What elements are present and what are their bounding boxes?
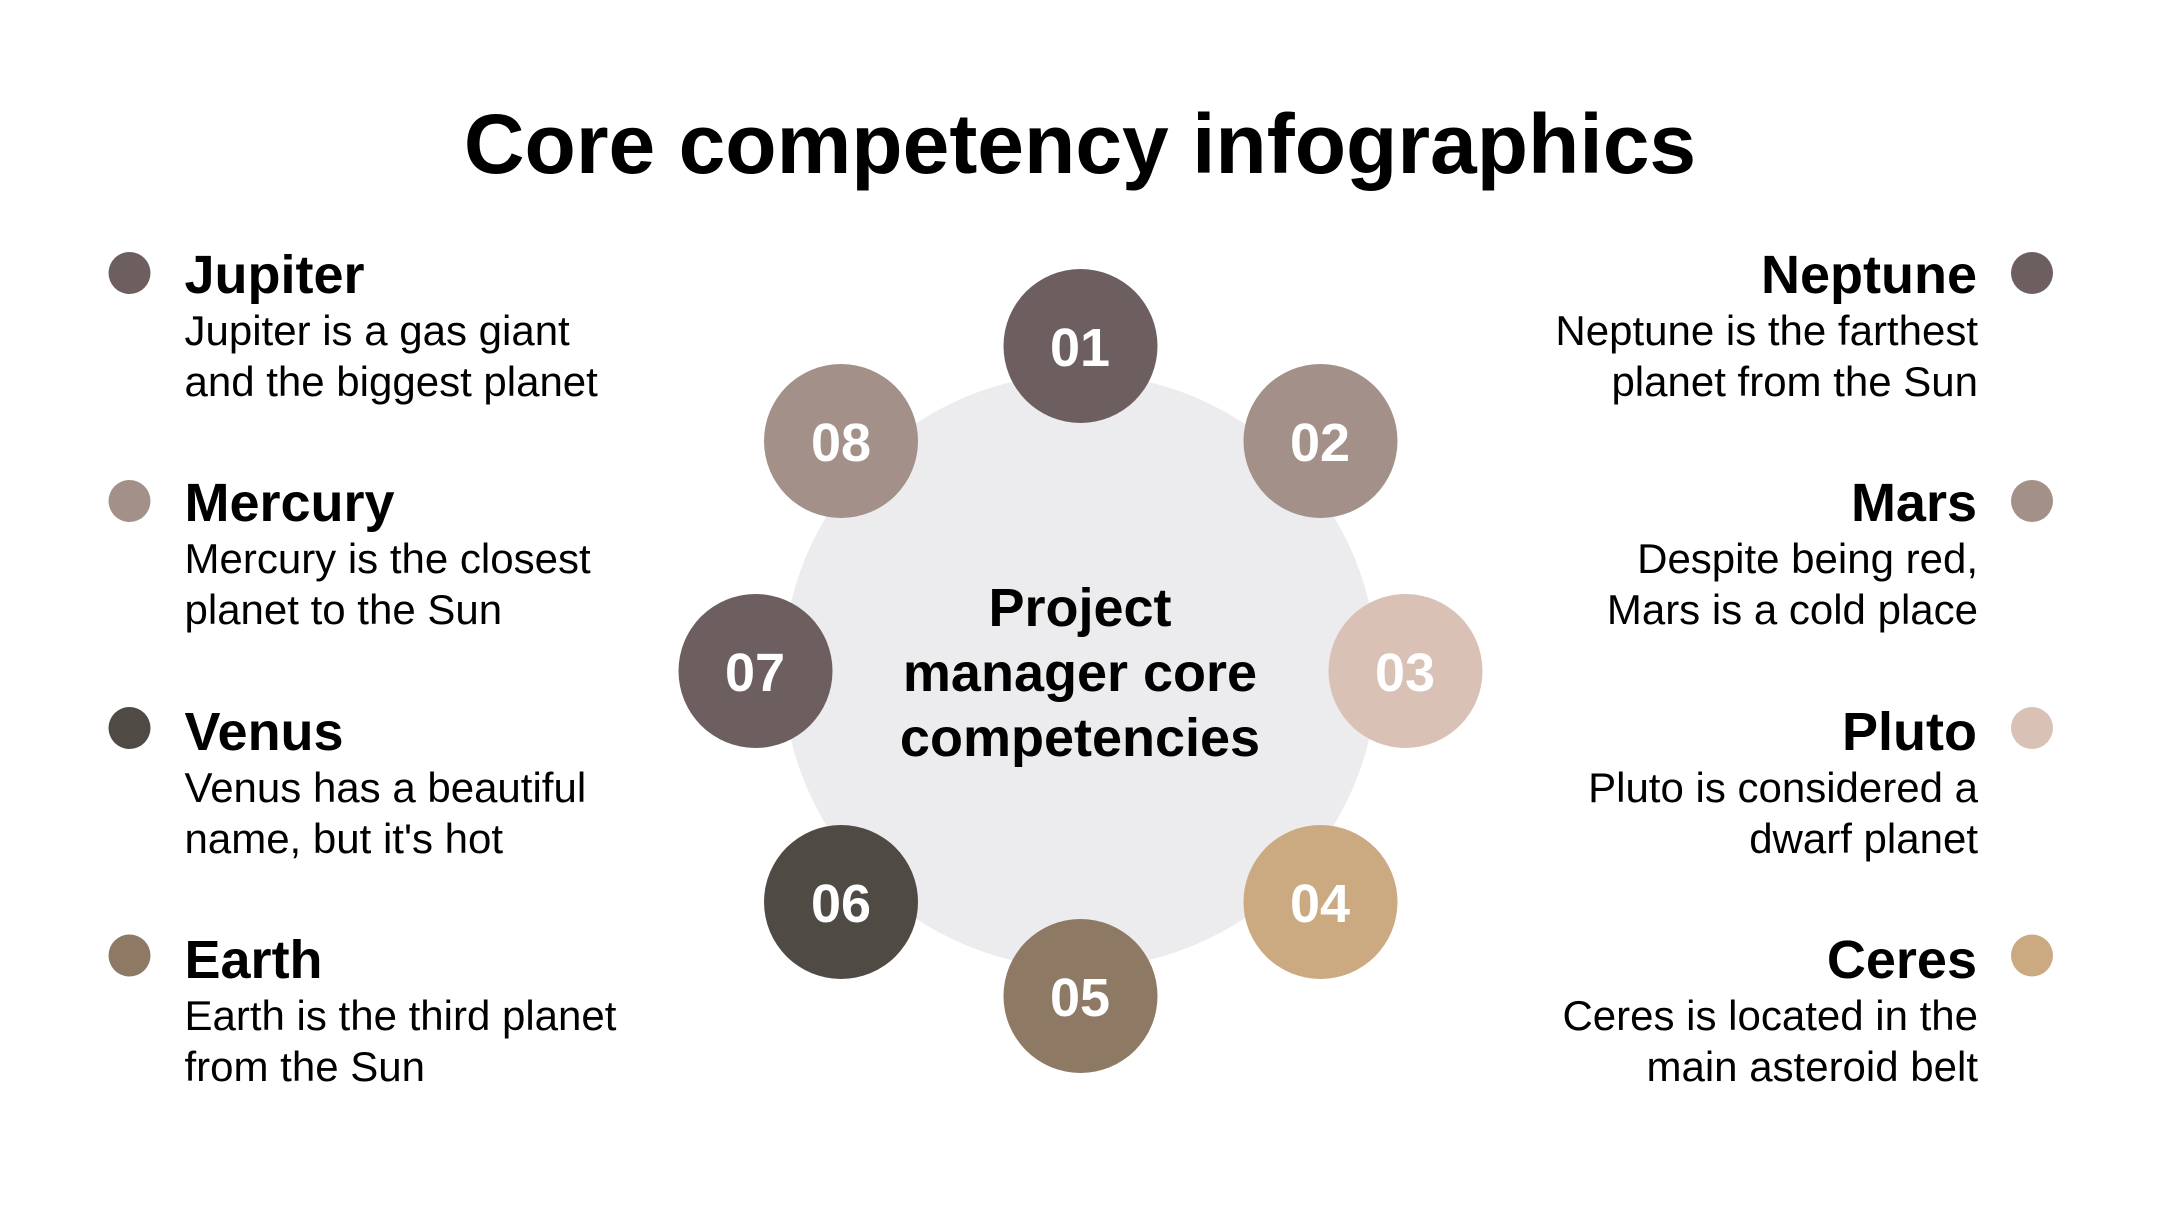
item: Venus [108, 702, 586, 862]
item: Neptune: Neptune is the farthest [1555, 307, 1978, 354]
node 04: 04 [1290, 874, 1350, 934]
item: Neptune: Neptune [1761, 245, 1977, 305]
node 02: 02 [1290, 413, 1350, 473]
node 03 [1328, 594, 1482, 748]
node 01 [1004, 269, 1158, 423]
item: Ceres: Ceres [1827, 930, 1977, 990]
central label: manager core [903, 643, 1257, 703]
item: Earth: from the Sun [184, 1043, 425, 1090]
node 03: 03 [1375, 643, 1435, 703]
item: Earth [108, 930, 617, 1090]
title: Core competency infographics [464, 97, 1696, 191]
node 08 [764, 364, 918, 518]
central disc [783, 374, 1377, 968]
item: Mercury: Mercury is the closest [184, 535, 591, 582]
item: Ceres: Ceres is located in the [1562, 992, 1978, 1039]
node 06 [764, 825, 918, 979]
item: Jupiter [108, 245, 598, 405]
item: Neptune [1555, 245, 2053, 405]
item: Earth: Earth [184, 930, 323, 990]
item: Jupiter: Jupiter is a gas giant [184, 307, 570, 354]
node 02 [1244, 364, 1398, 518]
item: Ceres [1562, 930, 2053, 1090]
panel: left column [108, 245, 617, 1090]
item: Pluto: dwarf planet [1749, 815, 1978, 862]
item: Pluto: Pluto is considered a [1588, 764, 1979, 811]
item: Earth: Earth is the third planet [184, 992, 617, 1039]
node 06: 06 [811, 874, 871, 934]
node 05: 05 [1050, 968, 1110, 1028]
item: Jupiter: Jupiter [184, 245, 365, 305]
item: Pluto: Pluto [1842, 702, 1977, 762]
item: Mars: Mars [1851, 473, 1977, 533]
node 08: 08 [811, 413, 871, 473]
item: Mercury [108, 473, 591, 633]
item: Mars: Despite being red, [1637, 535, 1978, 582]
item: Venus: Venus has a beautiful [184, 764, 586, 811]
item: Ceres: main asteroid belt [1646, 1043, 1978, 1090]
item: Venus: name, but it's hot [184, 815, 503, 862]
item: Mercury: planet to the Sun [184, 586, 502, 633]
central label: Project [988, 578, 1172, 638]
item: Pluto [1588, 702, 2053, 862]
node 04 [1244, 825, 1398, 979]
item: Mars: Mars is a cold place [1607, 586, 1978, 633]
item: Venus: Venus [184, 702, 344, 762]
central label [900, 578, 1260, 768]
node 05 [1004, 919, 1158, 1073]
node 07 [678, 594, 832, 748]
panel: right column [1555, 245, 2053, 1090]
central label: competencies [900, 708, 1260, 768]
item: Neptune: planet from the Sun [1611, 358, 1978, 405]
item: Mercury: Mercury [184, 473, 395, 533]
node 01: 01 [1050, 318, 1110, 378]
item: Jupiter: and the biggest planet [184, 358, 598, 405]
item: Mars [1607, 473, 2053, 633]
node 07: 07 [725, 643, 785, 703]
panel: central diagram [678, 269, 1482, 1073]
